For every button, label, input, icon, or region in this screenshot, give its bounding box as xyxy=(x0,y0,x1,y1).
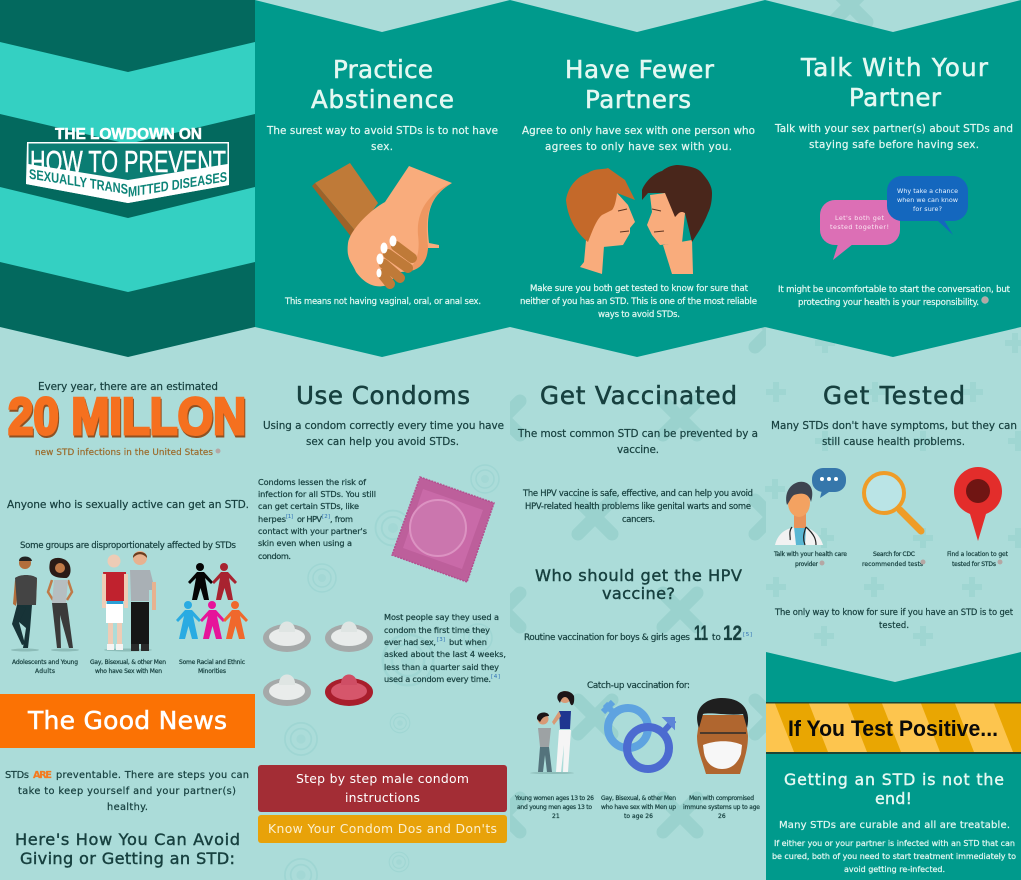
heading: Partner xyxy=(849,83,942,112)
title logo: SEXUALLY TRANS xyxy=(29,166,128,197)
text: routine vaccination ages: 12 xyxy=(723,622,742,645)
intro text: sex can help you avoid STDs. xyxy=(306,436,459,448)
tip: practice abstinence xyxy=(266,55,498,306)
intro text: Agree to only have sex with one person who xyxy=(522,125,755,137)
statistic: 20 million xyxy=(8,381,247,458)
text block: risk: Condoms lessen the risk of xyxy=(258,477,367,487)
speech bubble: blue: when we can know xyxy=(897,196,958,204)
text block: risk: [2] xyxy=(322,514,330,520)
text block: HPV vaccine: The HPV vaccine is safe, effective, and can help you avoid xyxy=(522,488,753,498)
heading: Abstinence xyxy=(311,85,454,114)
illustration: doctor xyxy=(775,482,823,545)
text block: usage: used a condom every time. xyxy=(384,674,491,684)
intro text xyxy=(263,420,504,448)
caption: ways to avoid STDs. xyxy=(598,310,680,320)
icon: male symbols xyxy=(603,702,674,769)
text block: usage: [3] xyxy=(437,637,445,643)
text block: risk: , from xyxy=(330,514,353,524)
speech bubble: blue: Why take a chance xyxy=(897,187,958,195)
heading: Talk With Your xyxy=(800,53,989,82)
text block: usage: less than a quarter said they xyxy=(384,662,499,672)
illustration: young woman and boy xyxy=(530,691,574,774)
illustration: gay and bisexual men xyxy=(102,551,156,652)
text block: risk: can get certain STDs, like xyxy=(258,501,359,511)
background cross at the top xyxy=(833,0,867,22)
caption: Make sure you both get tested to know for sure that xyxy=(530,284,749,294)
captions: catch-up groups: to age 26 xyxy=(624,813,653,820)
captions: groups: Gay, Bisexual, & other Men xyxy=(90,659,166,666)
icon: location pin xyxy=(954,467,1002,541)
captions: catch-up groups: immune systems up to age xyxy=(683,804,760,811)
text block: usage: Most people say they used a xyxy=(384,612,499,622)
panel: if you test positive xyxy=(766,652,1021,880)
text block: risk: herpes xyxy=(258,514,286,524)
heading xyxy=(565,55,715,114)
captions: groups: Adolescents and Young xyxy=(12,659,78,666)
section: use condoms xyxy=(258,381,507,843)
intro text xyxy=(774,123,1013,151)
intro text: agrees to only have sex with you. xyxy=(545,141,732,153)
captions: catch-up groups: Young women ages 13 to 26 xyxy=(514,795,594,802)
title logo: HOW TO PREVENT xyxy=(30,144,226,179)
intro text: Talk with your sex partner(s) about STDs and xyxy=(774,123,1013,135)
captions: testing steps: Find a location to get xyxy=(947,551,1009,558)
text: catch-up vaccination: Catch-up vaccination for: xyxy=(587,681,690,691)
button: condom instructions: instructions xyxy=(345,790,420,805)
caption: This means not having vaginal, oral, or anal sex. xyxy=(284,296,481,306)
title logo: THE LOWDOWN ON xyxy=(55,126,202,143)
captions: groups: Some Racial and Ethnic xyxy=(179,659,245,666)
text: routine vaccination ages: Routine vaccination for boys & girls ages xyxy=(524,633,690,643)
intro text xyxy=(266,125,498,153)
text: routine vaccination ages: [5] xyxy=(743,632,752,638)
intro text: still cause health problems. xyxy=(822,436,965,448)
heading: how to avoid xyxy=(15,830,240,868)
intro text: staying safe before having sex. xyxy=(809,139,979,151)
text: preventable: ARE xyxy=(33,770,52,781)
button: condom instructions xyxy=(258,765,507,812)
heading: how to avoid: Here's How You Can Avoid xyxy=(15,830,240,849)
heading: Have Fewer xyxy=(565,55,715,84)
title logo: MITTED DISEASES xyxy=(128,168,227,200)
tip: talk with your partner xyxy=(774,53,1013,308)
captions: testing steps: Search for CDC xyxy=(873,551,915,558)
text: curable and treatable: Many STDs are curable and all are treatable. xyxy=(779,820,1010,831)
speech bubble: pink xyxy=(820,200,900,260)
panel: top teal prevention tips xyxy=(255,0,1021,357)
text block: risk: infection for all STDs. You still xyxy=(258,489,376,499)
text block: risk: contact with your partner's xyxy=(258,526,367,536)
intro text: Using a condom correctly every time you have xyxy=(263,420,504,432)
text: routine vaccination ages: to xyxy=(712,633,721,643)
text: the only way: The only way to know for sure if you have an STD is to get xyxy=(774,607,1014,617)
text block: risk xyxy=(258,477,376,561)
intro text: The most common STD can be prevented by a xyxy=(517,428,758,440)
text block: HPV vaccine xyxy=(522,488,753,524)
background pattern: plus signs xyxy=(765,333,1021,646)
subheading: who should get the vaccine: vaccine? xyxy=(602,584,675,603)
speech bubble: pink: Let's both get xyxy=(835,214,884,222)
caption xyxy=(778,285,1011,308)
intro text xyxy=(517,428,758,456)
captions: catch-up groups: 21 xyxy=(552,813,560,820)
text block: risk: condom. xyxy=(258,551,291,561)
icon: magnifying glass xyxy=(864,473,921,531)
text block: usage: ever had sex, xyxy=(384,637,436,647)
text: anyone can get an STD: Anyone who is sexually active can get an STD. xyxy=(7,499,249,511)
text block: HPV vaccine: cancers. xyxy=(622,514,655,524)
captions: catch-up groups xyxy=(514,795,760,820)
heading xyxy=(800,53,989,112)
subheading: who should get the vaccine xyxy=(535,566,742,603)
text: start treatment: If either you or your partner is infected with an STD that can xyxy=(774,839,1015,848)
heading: not the end xyxy=(784,770,1004,808)
captions: catch-up groups: Gay, Bisexual, & other Men xyxy=(601,795,676,802)
captions: testing steps: tested for STDs xyxy=(952,561,996,568)
heading: Get Vaccinated xyxy=(540,381,737,410)
intro text: sex. xyxy=(371,141,393,153)
heading: Practice xyxy=(333,55,433,84)
captions: catch-up groups: 26 xyxy=(718,813,726,820)
illustration: man with mask xyxy=(697,698,748,774)
illustration: racial and ethnic minorities xyxy=(176,563,248,639)
icon: condom packet xyxy=(392,477,494,582)
text: start treatment xyxy=(772,839,1016,874)
text: preventable: STDs xyxy=(5,770,29,781)
text block: risk: [1] xyxy=(286,514,293,520)
captions: groups: Minorities xyxy=(198,668,226,675)
captions: testing steps: Talk with your health care xyxy=(773,551,847,558)
banner: the good news: The Good News xyxy=(27,706,227,735)
speech bubble: pink: tested together! xyxy=(830,223,889,231)
section: get vaccinated xyxy=(514,381,760,820)
text: preventable: take to keep yourself and your partner(s) xyxy=(18,786,236,797)
section: get tested xyxy=(771,381,1017,630)
text block: usage: but when xyxy=(449,637,487,647)
caption: neither of you has an STD. This is one of the most reliable xyxy=(520,297,757,307)
banner: if you test positive xyxy=(766,702,1021,754)
banner: if you test positive: If You Test Positive... xyxy=(788,716,998,741)
icon: two faces xyxy=(566,165,712,274)
intro text: vaccine. xyxy=(617,444,659,456)
panel: title chevrons xyxy=(0,0,255,357)
intro text: Many STDs don't have symptoms, but they can xyxy=(771,420,1017,432)
banner: the good news xyxy=(0,694,255,748)
text: routine vaccination ages: 11 xyxy=(694,622,708,645)
text block: usage: asked about the last 4 weeks, xyxy=(384,649,506,659)
intro text: The surest way to avoid STDs is to not have xyxy=(266,125,498,137)
heading: Use Condoms xyxy=(296,381,470,410)
icon: condoms xyxy=(263,622,373,706)
captions: groups xyxy=(12,659,245,675)
heading: not the end: Getting an STD is not the xyxy=(784,770,1004,789)
text: the only way: tested. xyxy=(879,620,909,630)
captions: catch-up groups: who have sex with Men up xyxy=(601,804,676,811)
text: the only way xyxy=(774,607,1014,630)
text block: usage: [4] xyxy=(491,674,500,680)
subheading: who should get the vaccine: Who should get the HPV xyxy=(535,566,742,585)
text: some groups: Some groups are disproportionately affected by STDs xyxy=(20,541,237,551)
captions: catch-up groups: Men with compromised xyxy=(689,795,754,802)
text: preventable xyxy=(5,770,249,813)
text block: HPV vaccine: HPV-related health problems like genital warts and some xyxy=(525,501,751,511)
big number: 20 MILLON xyxy=(9,390,247,448)
caption xyxy=(520,284,757,320)
heading: how to avoid: Giving or Getting an STD: xyxy=(20,849,235,868)
button: dos and don'ts: Know Your Condom Dos and Don'ts xyxy=(268,821,497,836)
sublabel: new STD infections in the United States xyxy=(35,448,213,458)
background pattern: crosses xyxy=(510,327,766,838)
captions: testing steps: provider xyxy=(795,561,819,568)
heading xyxy=(311,55,454,114)
captions: testing steps xyxy=(773,551,1009,568)
speech bubble: blue xyxy=(887,176,968,235)
button: condom instructions: Step by step male condom xyxy=(296,771,469,786)
intro text xyxy=(771,420,1017,448)
caption: protecting your health is your responsibility. xyxy=(798,298,979,308)
text block: usage: condom the first time they xyxy=(384,625,490,635)
text: routine vaccination ages xyxy=(524,622,752,645)
title logo xyxy=(26,126,229,203)
caption: It might be uncomfortable to start the conversation, but xyxy=(778,285,1011,295)
text block: usage xyxy=(384,612,506,684)
heading: not the end: end! xyxy=(875,789,912,808)
text: preventable: healthy. xyxy=(107,802,148,813)
text block: risk: or HPV xyxy=(297,514,322,524)
icon: holding hands xyxy=(312,163,452,286)
tip: have fewer partners xyxy=(520,55,757,320)
lead-in text: Every year, there are an estimated xyxy=(38,381,218,393)
captions: groups: Adults xyxy=(35,668,55,675)
intro text xyxy=(522,125,755,153)
heading: Partners xyxy=(585,85,691,114)
illustration: adolescents and young adults xyxy=(11,556,79,652)
text block: risk: skin even when using a xyxy=(258,538,352,548)
text: start treatment: avoid getting re-infected. xyxy=(844,865,945,874)
captions: testing steps: recommended tests xyxy=(862,561,923,568)
big number: 20 MILLON xyxy=(8,388,246,446)
button: dos and don'ts xyxy=(258,815,507,843)
background pattern: circles xyxy=(285,465,499,880)
text: start treatment: be cured, both of you need to start treatment immediately to xyxy=(772,852,1016,861)
captions: groups: who have Sex with Men xyxy=(95,668,162,675)
icon: doctor speech bubble xyxy=(812,468,846,498)
text: preventable: preventable. There are steps you can xyxy=(56,770,249,781)
heading: Get Tested xyxy=(823,381,965,410)
captions: catch-up groups: and young men ages 13 to xyxy=(517,804,592,811)
speech bubble: blue: for sure? xyxy=(913,205,942,213)
